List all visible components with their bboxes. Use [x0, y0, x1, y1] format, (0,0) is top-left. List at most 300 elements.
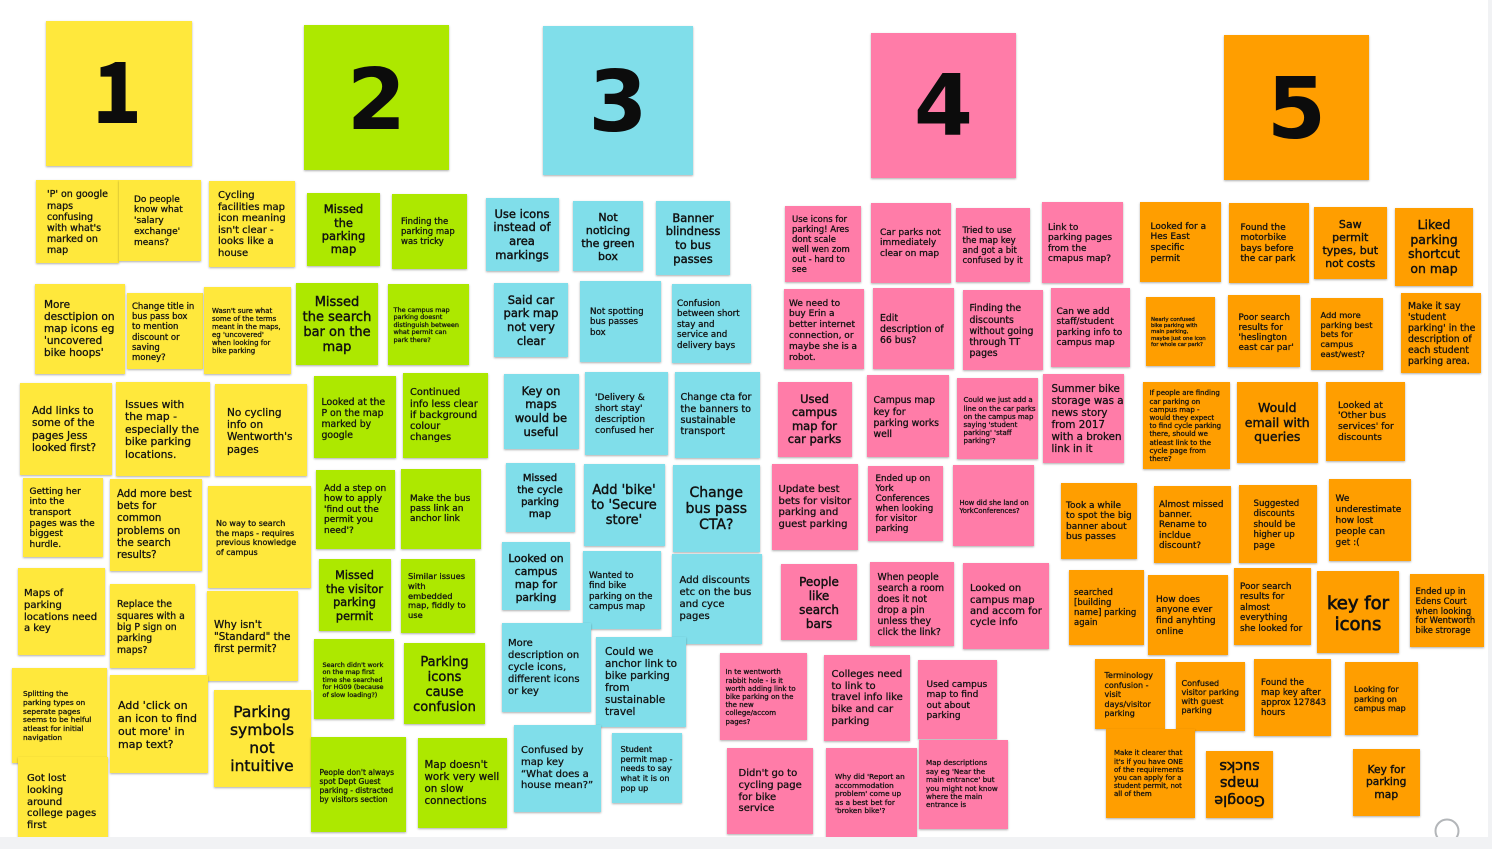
note: salary exchange: means? [134, 238, 169, 248]
note: wanted to find bike parking: parking on the [589, 592, 652, 602]
note: more description on cycle icons: or key [508, 686, 539, 697]
note: if people are finding car parking: there, should we [1150, 430, 1208, 438]
note: confused by map key: map key [521, 757, 564, 768]
note: missed the parking map [307, 192, 380, 266]
note: not noticing the green box [573, 201, 643, 271]
note: add discounts: etc on the bus [680, 587, 751, 598]
note: delivery and short stay [585, 372, 668, 455]
note: found the map key: hours [1261, 708, 1285, 718]
note: banner blindness [656, 201, 730, 275]
note: cycle info: campus map [970, 595, 1035, 606]
note: update best bets [772, 464, 858, 550]
note: search didn't work: of slow loading?) [322, 691, 377, 699]
note: key on maps: Key on [522, 384, 560, 398]
note: used campus map for car parks: Used [800, 392, 829, 406]
note: would email with queries [1237, 382, 1318, 462]
note: dept guest parking: spot Dept Guest [320, 777, 381, 786]
note: more description on cycle icons: More [508, 638, 533, 649]
note: poor search results: Poor search [1240, 582, 1291, 592]
note: map descriptions: entrance is [926, 800, 966, 809]
note: didn't go to cycling page: cycling page [738, 780, 802, 791]
note: cycling facilities icon: icon meaning [218, 213, 286, 224]
note: click on an icon: an icon to find [118, 712, 197, 724]
note: liked parking shortcut: on map [1410, 261, 1458, 276]
note: transport pages hurdle: pages was the [30, 519, 95, 529]
note: splitting parking types: parking types on [23, 698, 85, 707]
note: change cta: transport [680, 426, 725, 437]
note: add a step: permit you [324, 515, 373, 525]
note: wentworth rabbit hole: bike parking on the [726, 693, 793, 701]
note: add discounts: pages [680, 611, 710, 622]
note: key on maps [504, 374, 578, 449]
note: make it say student parking: each student [1408, 345, 1469, 356]
note: nearly confused bike parking: main parking, [1151, 329, 1188, 335]
note: issues with the map: bike parking [125, 435, 191, 448]
note: confused by map key: “What does a [521, 769, 589, 780]
panel: group 4 pink notes [718, 32, 1132, 837]
note: add bike to secure store: Add 'bike' [592, 483, 656, 498]
note: took a while to spot banner: Took a while [1066, 501, 1121, 511]
icon: loading circle [1434, 818, 1460, 837]
note: finding the parking map [392, 194, 466, 268]
note: almost missed banner: banner. [1159, 510, 1192, 520]
note: cycle info [963, 562, 1049, 648]
note: missed the search bar: Missed [315, 295, 359, 310]
note: tried map key: and got a bit [962, 246, 1017, 256]
note: link to parking pages [1042, 202, 1122, 283]
note: similar issues: embedded [408, 591, 452, 601]
note: got lost: looking [27, 785, 63, 796]
note: report accommodation problem: as a best bet for [835, 798, 895, 807]
number card 2 [304, 25, 449, 170]
number card 4 [871, 33, 1016, 178]
note: how does anyone find: How does [1156, 595, 1200, 605]
note: saw permit types: not costs [1325, 256, 1375, 270]
note: missed the visitor parking permit: the visitor [326, 583, 383, 596]
note: terminology confusion: visit [1104, 690, 1121, 699]
panel: group 5 orange notes [1060, 34, 1486, 820]
note: better internet: better internet [789, 320, 855, 330]
note: cycling facilities icon: house [218, 248, 248, 259]
note: similar issues: with [408, 581, 426, 591]
note: anchor link: sustainable [605, 694, 665, 706]
note: how does anyone find: find anyhting [1156, 616, 1216, 626]
note: almost missed banner: Almost missed [1159, 500, 1223, 510]
note: searched building name: name] parking [1074, 608, 1136, 618]
note: not spotting bus passes: Not spotting [590, 307, 644, 317]
note: add more best bets: problems on [117, 526, 180, 536]
note: update best bets: guest parking [778, 519, 848, 530]
note: confusion short stay: between short [677, 309, 740, 319]
note: add links to pages: pages Jess [32, 430, 88, 442]
note: staff student parking info: staff/student [1056, 317, 1114, 327]
note: use icons for parking: well wen zom [792, 245, 850, 255]
note: summer bike storage: link in it [1052, 443, 1093, 455]
note: how did she land: YorkConferences? [960, 506, 1020, 514]
note: tried map key: confused by it [962, 256, 1023, 266]
note: google maps sucks (upside down) [1206, 751, 1272, 818]
note: make it clearer: of the requirements [1114, 766, 1184, 774]
note: wentworth rabbit hole: the new [726, 701, 754, 709]
note: motorbike bays [1229, 203, 1309, 283]
note: used campus map for car parks: map for [792, 419, 837, 433]
note: saw permit types: types, but [1322, 244, 1378, 256]
note: more description on map icons [35, 284, 125, 374]
note: key for parking map: Key for [1368, 763, 1405, 776]
note: wanted to find bike parking: find bike [589, 581, 626, 591]
note: we underestimate: people can [1336, 526, 1385, 536]
note: staff student parking info: Can we add [1056, 307, 1110, 317]
note: no cycling info: No cycling [227, 407, 282, 419]
note: bus pass anchor link: Make the bus [410, 494, 470, 504]
note: terms in the maps: eg 'uncovered' [212, 331, 264, 339]
note: banner blindness: Banner [672, 211, 714, 225]
note: campus map key works well [867, 375, 949, 457]
note: splitting parking types: seperate pages [23, 707, 80, 716]
note: hes east permit: permit [1150, 254, 1180, 264]
note: more description on cycle icons: cycle icons, [508, 662, 566, 673]
note: maps need a key [18, 568, 104, 654]
note: york conferences [868, 466, 943, 540]
note: campus map key works well: parking works [874, 418, 939, 429]
note: report accommodation problem: accommodation [835, 781, 894, 790]
note: confusion short stay: service and [677, 330, 727, 340]
note: summer bike storage: from 2017 [1052, 419, 1105, 431]
note: missed the search bar: the search [303, 310, 371, 325]
note: bus pass anchor link [401, 468, 481, 548]
note: add bike to secure store: store' [606, 513, 642, 528]
note: better internet: buy Erin a [789, 309, 835, 319]
note: google maps sucks (upside down): sucks [1219, 758, 1259, 774]
note: car park map not clear [494, 283, 568, 357]
note: use icons for parking [784, 206, 860, 282]
note: car parks not clear: clear on map [880, 249, 939, 259]
note: parking symbols not intuitive: not [249, 739, 275, 757]
note: how does anyone find: online [1156, 627, 1183, 637]
note: we underestimate: underestimate [1336, 504, 1401, 514]
note: drop a pin [870, 562, 954, 646]
note: other bus services: Looked at [1338, 400, 1383, 411]
note: missed the cycle parking map: the cycle [517, 485, 563, 496]
note: add links to pages [20, 383, 112, 475]
note: if people are finding car parking: would they expect [1150, 414, 1214, 422]
note: terms in the maps [204, 287, 291, 374]
note: anchor link: anchor link to [605, 658, 677, 670]
note: got lost: first [27, 820, 47, 831]
note: drop a pin: does it not [878, 594, 927, 604]
note: saw permit types [1314, 206, 1386, 279]
note: bus pass anchor link: anchor link [410, 514, 460, 524]
note: P on google maps: marked on [47, 234, 98, 245]
note: edens court: Edens Court [1416, 596, 1467, 606]
note: york conferences: Ended up on [876, 474, 930, 484]
note: more description on map icons: map icons eg [44, 323, 114, 335]
note: key for parking map: map [1374, 788, 1398, 801]
note: confusion short stay: Confusion [677, 299, 720, 309]
note: used campus map to find parking: Used campus [926, 680, 987, 690]
note: dept guest parking [311, 737, 406, 832]
note: campus map key works well: key for [874, 407, 906, 418]
note: add a line on the car parks: parking'? [964, 437, 996, 445]
note: found the map key [1254, 659, 1331, 736]
note: we underestimate: get :( [1336, 538, 1360, 548]
note: use icons: instead of [493, 220, 551, 234]
note: campus map permit: park there? [394, 336, 431, 344]
note: looked on campus map [502, 542, 570, 610]
note: if people are finding car parking: there? [1150, 455, 1172, 463]
note: motorbike bays: motorbike [1240, 233, 1286, 243]
note: delivery and short stay: short stay' [595, 404, 643, 414]
note: banner blindness: blindness [666, 224, 720, 238]
note: similar issues: map, fiddly to [408, 600, 466, 610]
note: missed the parking map: the [334, 216, 353, 230]
note: took a while to spot banner: bus passes [1066, 532, 1116, 542]
note: would email with queries: email with [1245, 415, 1310, 430]
note: liked parking shortcut: Liked [1418, 217, 1450, 232]
note: campus map key works well: Campus map [874, 395, 935, 406]
note: liked parking shortcut [1395, 208, 1473, 286]
note: salary exchange: Do people [134, 195, 180, 205]
note: other bus services [1326, 382, 1405, 461]
note: missed the cycle parking map [506, 463, 574, 532]
note: tried map key [956, 208, 1030, 282]
note: terminology confusion: confusion - [1104, 681, 1149, 690]
note: if people are finding car parking [1143, 382, 1230, 468]
note: colleges need to link: travel info like [832, 692, 903, 703]
note: wanted to find bike parking: campus map [589, 602, 645, 612]
note: add more best bets [110, 479, 202, 571]
note: poor search results: results for [1240, 592, 1284, 602]
note: missed the cycle parking map: map [529, 509, 551, 520]
note: poor search heslington: results for [1238, 322, 1283, 332]
note: slow connections: on slow [424, 783, 464, 795]
note: nearly confused bike parking: maybe just one icon [1151, 336, 1206, 342]
note: york conferences: when looking [876, 504, 933, 514]
note: didn't go to cycling page: for bike [738, 792, 776, 803]
note: drop a pin: click the link? [878, 626, 941, 638]
note: suggested discounts: page [1254, 541, 1275, 551]
note: nearly confused bike parking: bike parking with [1151, 323, 1197, 329]
note: add a step: need'? [324, 526, 354, 536]
note: how did she land: How did she land on [960, 498, 1029, 506]
note: got lost: around [27, 797, 62, 808]
note: transport pages hurdle: biggest [30, 529, 63, 539]
panel: group 3 blue notes [484, 26, 764, 814]
note: add a step: how to apply [324, 494, 382, 504]
note: if people are finding car parking: atleast link to the [1150, 439, 1211, 447]
note: student permit map: permit map - [620, 755, 673, 764]
note: make it clearer: it's if you have ONE [1114, 758, 1183, 766]
note: people like search bars: bars [806, 616, 832, 630]
note: search didn't work: on the map first [322, 668, 375, 676]
number card 1: 1 [93, 27, 141, 146]
note: cycling facilities icon: facilities map [218, 202, 285, 213]
note: anchor link: bike parking [605, 670, 670, 682]
note: colleges need to link: to link to [832, 681, 876, 692]
note: key on maps: useful [524, 425, 558, 439]
note: transport pages hurdle: hurdle. [30, 540, 61, 550]
note: continued info [402, 373, 488, 458]
note: looked at the P: P on the map [322, 408, 383, 418]
note: used campus map for car parks: car parks [788, 432, 841, 446]
note: no cycling info: pages [227, 444, 259, 456]
note: didn't go to cycling page [727, 748, 813, 834]
note: poor search results: everything [1240, 613, 1287, 623]
note: terms in the maps: bike parking [212, 347, 255, 355]
note: motorbike bays: the car park [1240, 254, 1295, 264]
note: suggested discounts: should be [1254, 520, 1295, 530]
note: not noticing the green box: the green [581, 236, 635, 250]
note: edit description of 66 bus: 66 bus? [880, 334, 916, 346]
note: searched building name: searched [1074, 588, 1113, 598]
note: better internet: maybe she is a [789, 342, 857, 352]
note: nearly confused bike parking: for whole car park? [1151, 342, 1203, 348]
note: add bike to secure store [584, 464, 664, 546]
note: splitting parking types: atleast for initial [23, 724, 84, 733]
note: no way to search the maps: previous knowledge [216, 538, 296, 547]
note: used campus map to find parking: map to find [926, 690, 978, 700]
note: hes east permit [1140, 202, 1220, 282]
note: hes east permit: Hes East [1150, 232, 1190, 242]
note: add more parking best bets: campus [1320, 339, 1353, 349]
note: maps need a key: Maps of [24, 588, 63, 599]
number card 3: 3 [588, 53, 648, 152]
note: terms in the maps: when looking for [212, 339, 270, 347]
note: google maps sucks (upside down): maps [1219, 776, 1259, 792]
note: student permit map: what it is on [620, 774, 670, 783]
note: almost missed banner: discount? [1159, 541, 1201, 551]
note: why isn't standard first: Why isn't [214, 619, 262, 631]
note: link to parking pages: parking pages [1048, 233, 1112, 243]
note: add more best bets: results? [117, 550, 157, 561]
note: would email with queries: queries [1254, 429, 1300, 444]
note: similar issues [401, 559, 475, 633]
note: staff student parking info: parking info to [1056, 328, 1122, 338]
note: salary exchange: know what [134, 205, 183, 215]
note: almost missed banner: incldue [1159, 531, 1191, 541]
note: change title in bus pass box: bus pass box [132, 312, 187, 322]
panel: group 2 green notes [294, 24, 508, 834]
note: more description on map icons: desctipion on [44, 311, 114, 323]
note: we underestimate: We [1336, 494, 1349, 504]
note: key on maps: maps [525, 397, 557, 411]
note: delivery and short stay: confused her [595, 426, 654, 436]
note: edens court: when looking [1416, 606, 1471, 616]
note: splitting parking types: seems to be helful [23, 715, 91, 724]
note: motorbike bays: Found the [1240, 223, 1286, 233]
note: make it clearer: Make it clearer that [1114, 749, 1182, 757]
note: summer bike storage [1043, 374, 1124, 463]
note: search didn't work: for HG09 (because [322, 683, 384, 691]
note: add links to pages: Add links to [32, 405, 94, 417]
note: change bus pass CTA: Change [689, 485, 743, 501]
note: got lost: college pages [27, 808, 96, 819]
note: used campus map to find parking: parking [926, 711, 961, 721]
note: drop a pin: drop a pin [878, 604, 925, 616]
note: similar issues: Similar issues [408, 571, 465, 581]
note: looking for parking: campus map [1354, 704, 1406, 713]
note: wanted to find bike parking: Wanted to [589, 571, 634, 581]
note: car parks not clear: Car parks not [880, 228, 941, 238]
note: suggested discounts [1239, 485, 1317, 563]
note: update best bets: Update best [778, 484, 840, 495]
note: delivery and short stay: description [595, 414, 645, 424]
note: add discounts: Add discounts [680, 575, 750, 586]
note: replace squares with P sign: big P sign on [117, 622, 177, 633]
note: report accommodation problem: problem' come up [835, 789, 901, 798]
note: add links to pages: some of the [32, 417, 95, 429]
note: terminology confusion: parking [1104, 709, 1135, 718]
note: campus map permit: The campus map [394, 306, 450, 314]
note: key on maps: would be [515, 411, 567, 425]
note: drop a pin: unless they [878, 616, 931, 626]
note: poor search results [1234, 568, 1310, 645]
note: more description on cycle icons [502, 623, 590, 712]
note: key for parking map [1353, 749, 1420, 816]
note: parking icons cause confusion: Parking [420, 654, 469, 670]
note: parking symbols not intuitive: symbols [230, 721, 294, 739]
note: better internet: connection, or [789, 331, 854, 341]
note: campus map permit: parking doesnt [394, 313, 442, 321]
note: add a line on the car parks: parking' 'staff [964, 429, 1012, 437]
note: other bus services: services' for [1338, 421, 1394, 432]
note: got lost: Got lost [27, 773, 66, 784]
note: maps need a key: parking [24, 600, 62, 611]
note: confused by map key: Confused by [521, 745, 583, 756]
note: click on an icon: map text? [118, 738, 173, 750]
note: not noticing the green box: noticing [586, 224, 630, 236]
note: search didn't work: Search didn't work [322, 661, 383, 669]
note: motorbike bays: bays before [1240, 244, 1294, 254]
note: staff student parking info: campus map [1056, 338, 1115, 348]
note: didn't go to cycling page: Didn't go to [738, 768, 797, 779]
note: wentworth rabbit hole: college/accom [726, 709, 776, 717]
note: terms in the maps: Wasn't sure what [212, 307, 272, 315]
note: better internet: We need to [789, 299, 840, 309]
note: looked at the P: Looked at the [322, 396, 385, 408]
note: issues with the map: the map - [125, 410, 177, 423]
note: slow connections: Map doesn't [424, 759, 487, 771]
note: campus map key works well: well [874, 429, 892, 440]
note: saw permit types: Saw [1339, 218, 1362, 230]
note: use icons for parking: see [792, 265, 807, 275]
note: looked on campus map: campus [515, 564, 557, 578]
note: wentworth rabbit hole: rabbit hole - is it [726, 677, 783, 685]
note: took a while to spot banner [1061, 482, 1137, 558]
note: colleges need to link [824, 654, 910, 740]
note: splitting parking types: navigation [23, 733, 62, 742]
note: searched building name [1068, 570, 1144, 644]
note: cycling facilities icon [209, 181, 295, 267]
note: search didn't work: time she searched [322, 676, 383, 684]
note: edit description of 66 bus: Edit [880, 312, 898, 324]
note: searched building name: [building [1074, 598, 1111, 608]
note: map descriptions: where the main [926, 792, 982, 801]
note: use icons for parking: dont scale [792, 235, 836, 245]
note: no way to search the maps: of campus [216, 548, 258, 557]
note: looked at the P [314, 376, 396, 458]
note: maps need a key: a key [24, 623, 51, 634]
note: map descriptions: you might not know [926, 784, 998, 793]
note: salary exchange [119, 180, 201, 260]
note: no cycling info: info on [227, 419, 263, 431]
note: saw permit types: permit [1332, 230, 1368, 244]
note: google maps sucks (upside down): Google [1214, 792, 1264, 808]
note: drop a pin: When people [878, 572, 939, 582]
note: confused visitor parking [1176, 662, 1245, 731]
note: slow connections: connections [424, 795, 487, 807]
note: splitting parking types [12, 668, 107, 763]
